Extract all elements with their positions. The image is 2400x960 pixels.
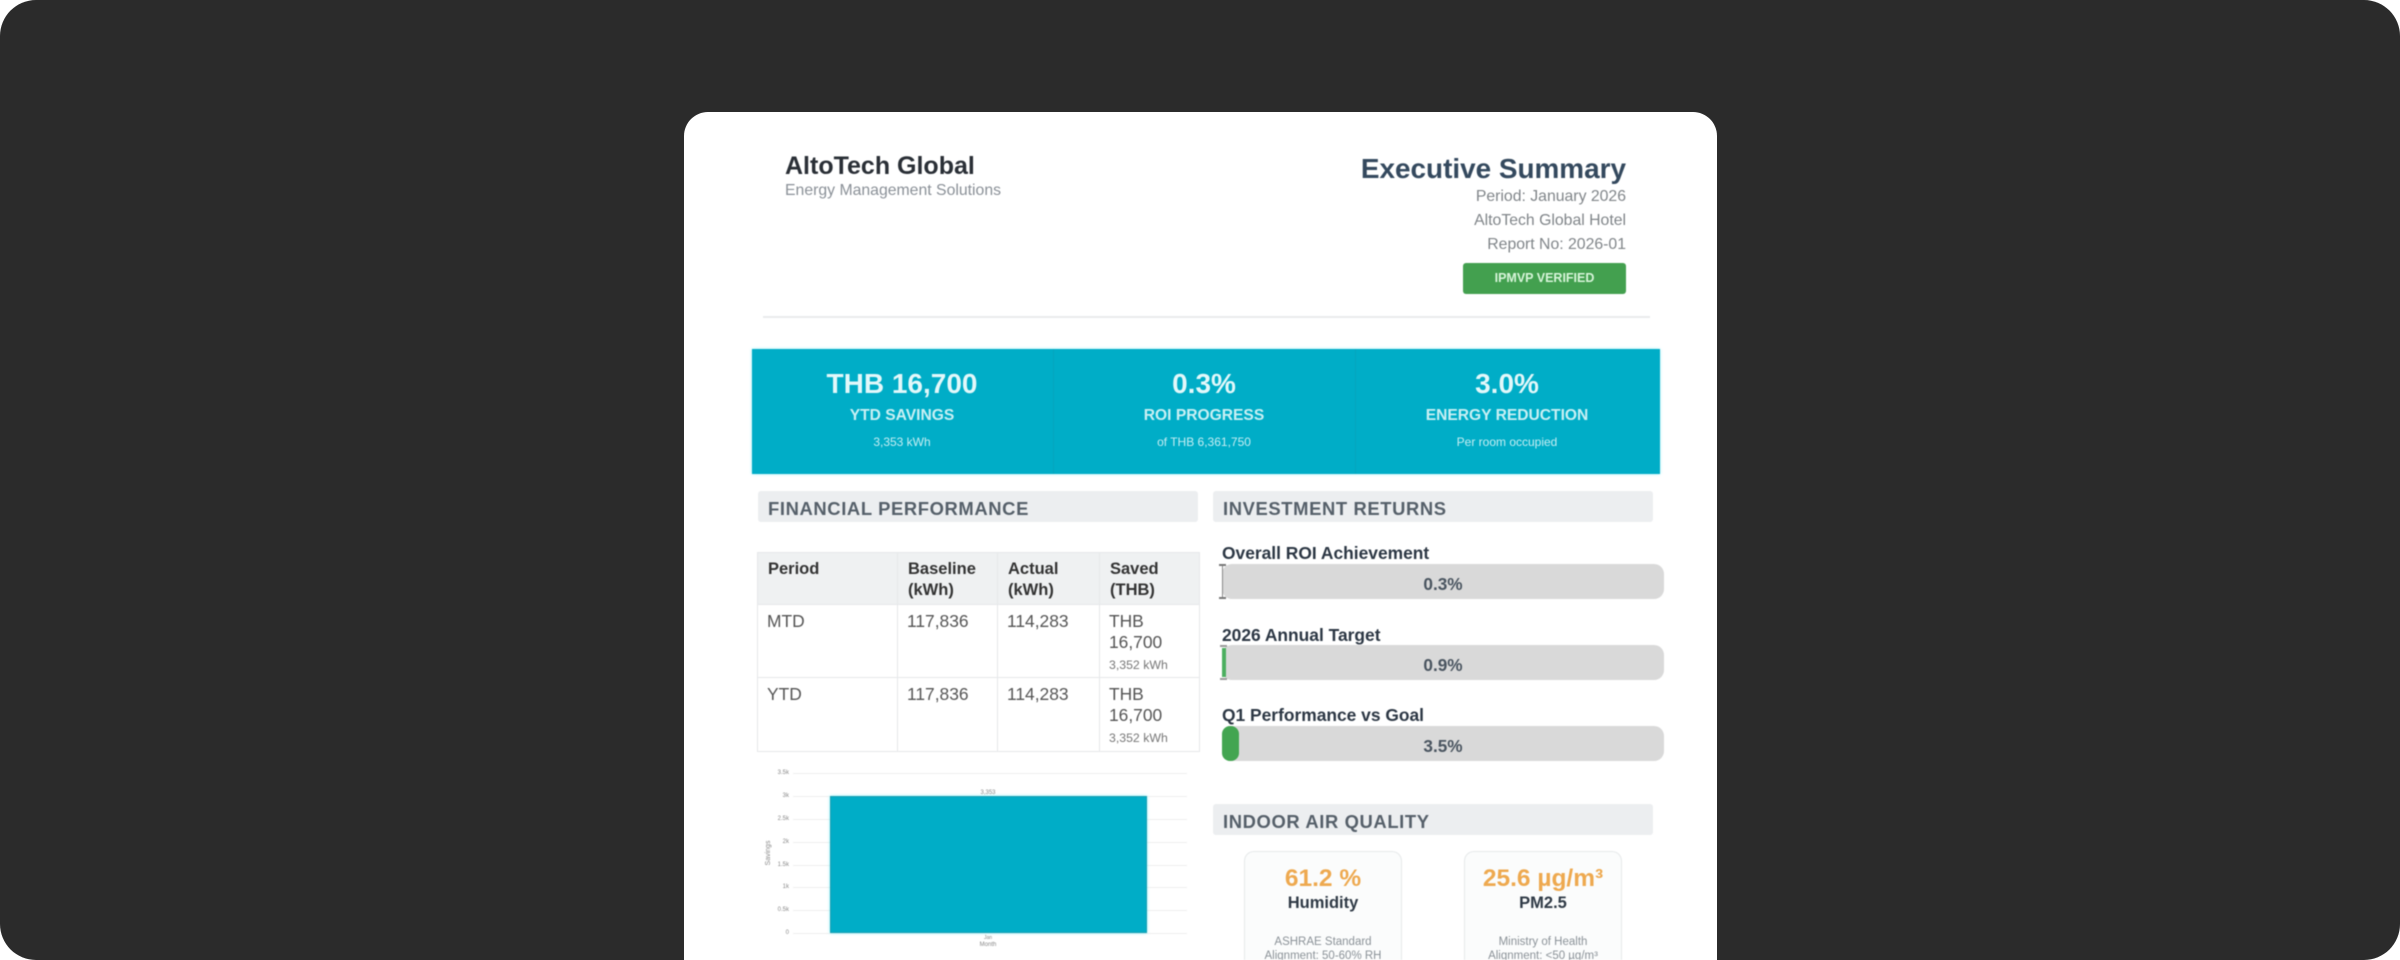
x axis title: Month — [980, 942, 996, 948]
KPI: energy reduction: ENERGY REDUCTION — [1426, 407, 1588, 424]
air quality card: humidity — [1244, 851, 1402, 960]
financial table — [757, 552, 1200, 752]
table header row — [757, 552, 1200, 604]
bar value label: 3,353 — [980, 790, 996, 796]
y axis tick labels: 0 — [786, 930, 789, 936]
table row: YTD: 3,352 kWh — [1109, 731, 1168, 745]
x axis tick label: Jan — [984, 935, 992, 941]
table row: MTD: 3,352 kWh — [1109, 658, 1168, 672]
KPI: energy reduction: Per room occupied — [1457, 435, 1557, 449]
report title: Executive Summary — [1361, 153, 1626, 184]
KPI: YTD savings: THB 16,700 — [827, 368, 977, 399]
table row: YTD — [757, 678, 1200, 752]
y axis tick labels: 3k — [783, 793, 789, 799]
period: Period: January 2026 — [1476, 188, 1626, 205]
humidity label: Humidity — [1288, 894, 1358, 912]
heading: investment returns: INVESTMENT RETURNS — [1223, 498, 1447, 519]
bar chart: monthly savings — [764, 768, 1186, 948]
y axis tick labels: 1.5k — [778, 862, 789, 868]
y axis tick labels: 2k — [783, 839, 789, 845]
badge: IPMVP verified — [1463, 263, 1626, 294]
progress label: Q1 Performance vs Goal — [1222, 705, 1424, 725]
PM2.5 value: 25.6 µg/m³ — [1483, 865, 1603, 892]
report number: Report No: 2026-01 — [1487, 236, 1626, 253]
table row: MTD: 117,836 — [907, 611, 969, 631]
table row: YTD: 117,836 — [907, 684, 969, 704]
heading: investment returns — [1213, 491, 1653, 522]
y axis title: Savings — [765, 841, 772, 865]
KPI: energy reduction — [1426, 368, 1588, 450]
table header row: Saved — [1110, 560, 1159, 578]
progress item: overall ROI — [1218, 543, 1664, 600]
KPI: energy reduction: 3.0% — [1475, 368, 1539, 399]
heading: financial performance — [758, 491, 1198, 522]
progress item: annual target — [1220, 625, 1664, 680]
humidity value: 61.2 % — [1285, 865, 1361, 892]
y axis tick labels: 1k — [783, 884, 789, 890]
y axis tick labels: 0.5k — [778, 907, 789, 913]
progress label: 2026 Annual Target — [1222, 625, 1380, 645]
progress track — [1222, 726, 1664, 761]
company name: AltoTech Global — [785, 152, 975, 180]
heading: indoor air quality — [1213, 804, 1653, 835]
table header row: Actual — [1008, 560, 1058, 578]
y axis tick labels: 3.5k — [778, 770, 789, 776]
table row: MTD: 16,700 — [1109, 632, 1162, 652]
table row: YTD: THB — [1109, 684, 1144, 704]
table row: YTD: YTD — [767, 684, 802, 704]
progress item: Q1 performance — [1221, 705, 1664, 762]
header: report details — [1361, 153, 1627, 295]
KPI: ROI progress: of THB 6,361,750 — [1157, 435, 1251, 449]
badge: IPMVP verified: IPMVP VERIFIED — [1495, 271, 1594, 285]
progress track: 3.5% — [1423, 736, 1463, 756]
PM2.5 label: PM2.5 — [1519, 894, 1567, 912]
KPI: YTD savings — [826, 368, 978, 449]
heading: indoor air quality: INDOOR AIR QUALITY — [1223, 811, 1430, 832]
y axis tick labels: 2.5k — [778, 816, 789, 822]
humidity note — [1264, 936, 1382, 960]
heading: financial performance: FINANCIAL PERFORMANCE — [768, 498, 1029, 519]
table row: MTD: 114,283 — [1007, 611, 1069, 631]
table row: YTD: 114,283 — [1007, 684, 1069, 704]
air quality card: PM2.5 — [1464, 851, 1622, 960]
KPI: ROI progress: ROI PROGRESS — [1144, 407, 1264, 424]
table header row: (THB) — [1110, 581, 1155, 599]
KPI: YTD savings: YTD SAVINGS — [850, 407, 954, 424]
PM2.5 note: Ministry of Health — [1499, 936, 1587, 948]
humidity note: ASHRAE Standard — [1274, 936, 1372, 948]
progress track — [1222, 645, 1664, 680]
hotel name: AltoTech Global Hotel — [1474, 212, 1626, 229]
progress fill — [1222, 726, 1239, 761]
table row: MTD: MTD — [767, 611, 805, 631]
bar: January — [830, 796, 1147, 933]
table header row: Period — [768, 560, 819, 578]
table header row: (kWh) — [908, 581, 954, 599]
table header row: Baseline — [908, 560, 976, 578]
progress track: 0.3% — [1423, 574, 1463, 594]
PM2.5 note — [1488, 936, 1598, 960]
progress label: Overall ROI Achievement — [1222, 543, 1429, 563]
progress fill marker — [1220, 645, 1227, 680]
progress track — [1222, 564, 1664, 599]
table row: MTD: THB — [1109, 611, 1144, 631]
progress fill marker — [1219, 564, 1226, 599]
KPI: YTD savings: 3,353 kWh — [873, 435, 931, 449]
company tagline: Energy Management Solutions — [785, 182, 1001, 199]
progress track: 0.9% — [1423, 655, 1463, 675]
y axis tick labels — [777, 768, 790, 936]
header: company brand — [785, 152, 1001, 200]
table row: MTD — [757, 605, 1200, 677]
report page card — [684, 112, 1717, 960]
table row: YTD: 16,700 — [1109, 705, 1162, 725]
KPI: ROI progress: 0.3% — [1172, 368, 1236, 399]
KPI banner — [752, 349, 1660, 474]
table header row: (kWh) — [1008, 581, 1054, 599]
KPI: ROI progress — [1144, 368, 1264, 449]
